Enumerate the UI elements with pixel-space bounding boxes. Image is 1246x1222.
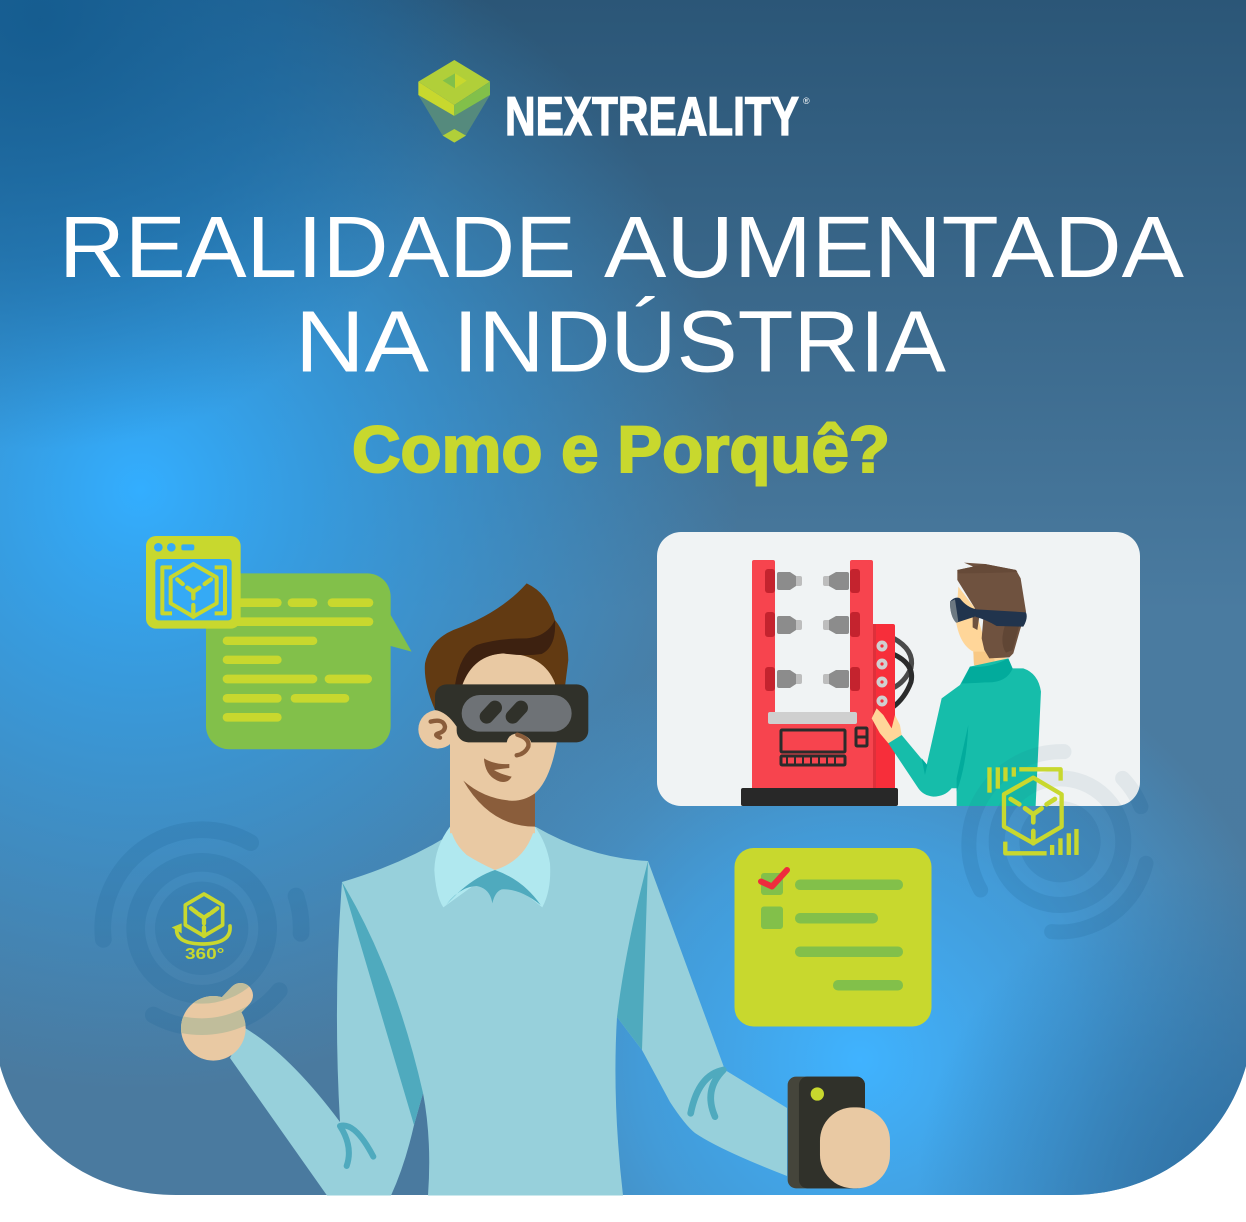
right elbow fold xyxy=(691,1070,723,1117)
goggles xyxy=(435,684,588,742)
hair xyxy=(957,563,1026,658)
checkbox lines xyxy=(761,873,903,990)
rings behind 360 icon xyxy=(103,830,301,1028)
checklist card xyxy=(734,848,932,1026)
title: REALIDADE xyxy=(59,199,576,296)
operator head xyxy=(950,563,1027,670)
logo xyxy=(418,60,810,147)
ring bands on hand xyxy=(181,983,249,1035)
left hand xyxy=(181,983,253,1061)
face xyxy=(450,653,557,833)
right hand with device xyxy=(788,1077,890,1188)
icon: 360 cube xyxy=(172,894,230,963)
rings over panel xyxy=(1036,744,1139,806)
icon: 360 cube: 360° xyxy=(185,946,224,963)
operator body xyxy=(872,658,1041,806)
speech bubble panel xyxy=(206,573,412,749)
shirt xyxy=(888,658,1041,806)
icon: logo cube xyxy=(418,60,490,143)
neck shadow xyxy=(463,781,535,827)
title: AUMENTADA xyxy=(604,199,1184,296)
hand xyxy=(872,708,902,743)
shirt xyxy=(230,827,787,1196)
cables xyxy=(893,638,912,707)
registered mark: ® xyxy=(803,96,810,106)
panel: machine operator xyxy=(657,532,1140,806)
title: NA xyxy=(295,294,429,390)
machine xyxy=(741,560,912,806)
hair fringe shadow xyxy=(455,620,555,685)
man with AR headset xyxy=(103,583,890,1196)
title: INDÚSTRIA xyxy=(453,294,946,390)
title xyxy=(59,199,1184,390)
left cuff fold xyxy=(340,1125,373,1166)
icon: AR cube with barcode and signal xyxy=(987,767,1079,855)
nose xyxy=(507,733,532,757)
red check mark xyxy=(761,870,787,886)
hair back xyxy=(425,583,568,710)
mouth xyxy=(484,758,512,782)
panel background xyxy=(657,532,1140,806)
head xyxy=(418,583,588,833)
ear xyxy=(418,710,457,749)
shirt folds xyxy=(342,861,648,1125)
neck and face xyxy=(956,587,1007,670)
rings over background xyxy=(962,788,1140,940)
bubble shape xyxy=(206,573,412,749)
icon: browser window with cube xyxy=(146,536,241,629)
card background xyxy=(734,848,932,1026)
bubble text lines xyxy=(223,598,373,722)
rings right xyxy=(969,752,1146,932)
headset xyxy=(950,598,1027,627)
collar and neck xyxy=(434,820,550,907)
subtitle: Como e Porquê? xyxy=(352,412,890,486)
logo wordmark: NEXTREALITY xyxy=(505,86,799,147)
